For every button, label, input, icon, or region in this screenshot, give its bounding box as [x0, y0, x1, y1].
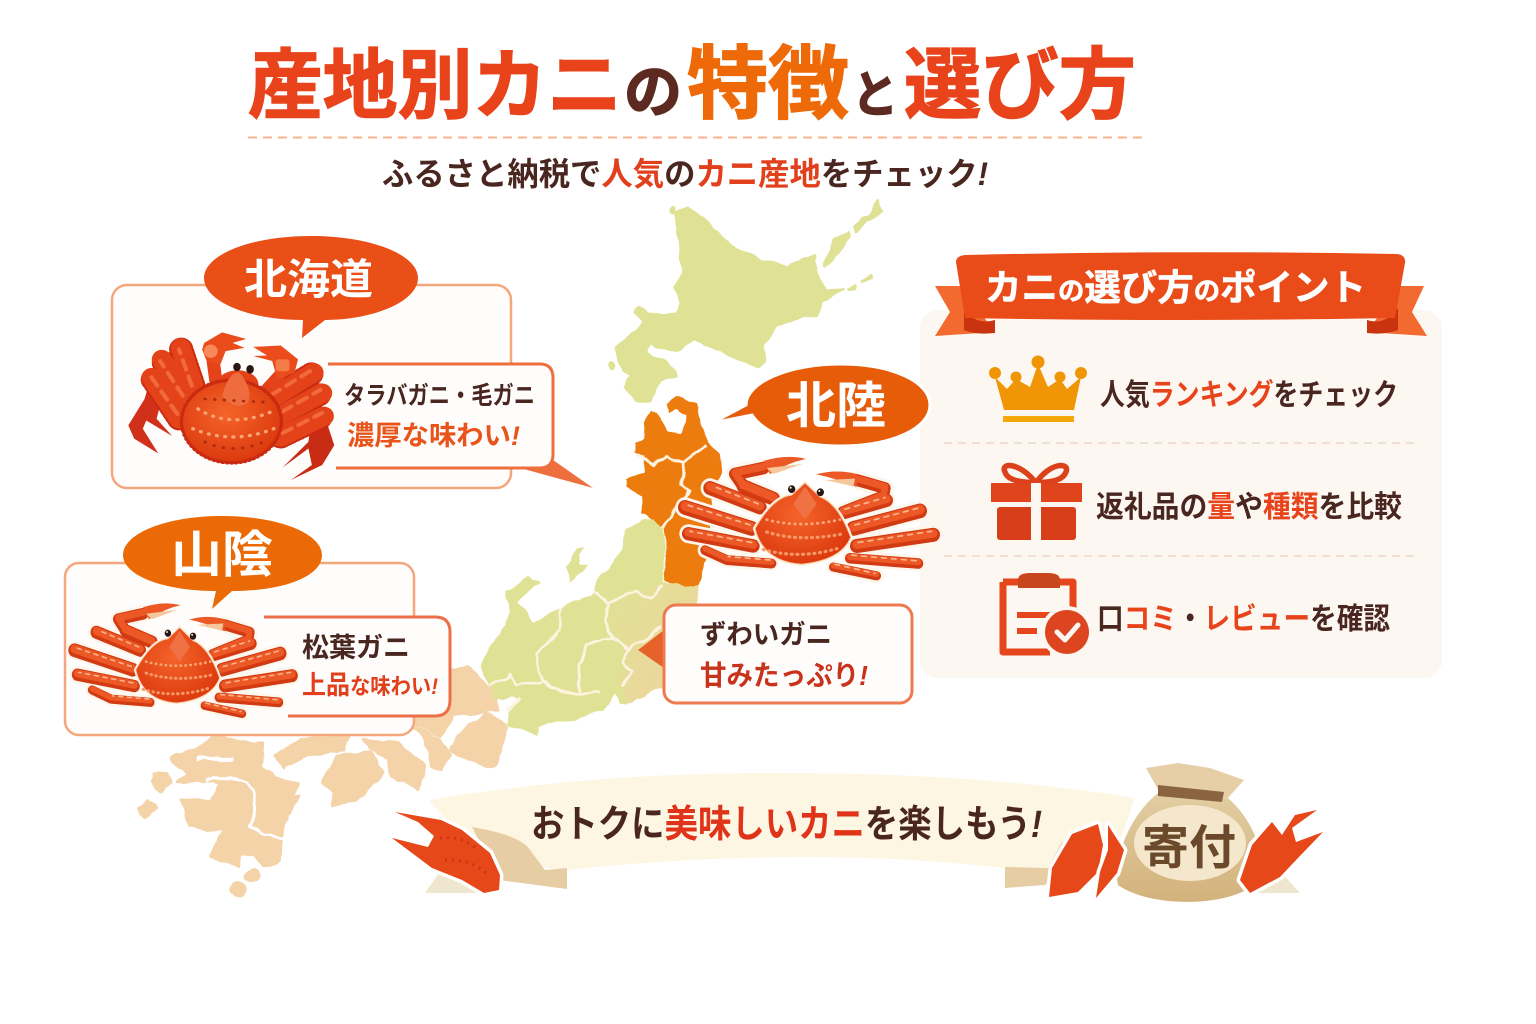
callout: Hokkaido crab — [328, 364, 593, 488]
label: Hokkaido: 北海道 — [244, 256, 373, 303]
icon: clipboard check — [1003, 573, 1093, 658]
panel: San'in — [65, 516, 450, 735]
row: ranking: 人気ランキングをチェック — [1100, 379, 1398, 412]
label: Hokuriku: 北陸 — [786, 378, 886, 434]
illustration: king crab — [128, 332, 334, 480]
title: の — [624, 60, 682, 125]
ribbon heading — [935, 252, 1427, 336]
ribbon heading: カニの選び方のポイント — [985, 267, 1366, 308]
panel: Hokkaido — [112, 236, 593, 488]
callout: Hokuriku snow crab: 甘みたっぷり! — [700, 660, 868, 691]
subtitle: ふるさと納税で人気のカニ産地をチェック! — [382, 156, 988, 192]
callout: San'in crab — [264, 617, 450, 716]
title — [248, 40, 1136, 129]
callout: San'in crab: 松葉ガニ — [302, 633, 410, 663]
bottom banner — [425, 773, 1300, 893]
callout: Hokuriku snow crab: ずわいガニ — [700, 620, 832, 650]
title: と — [852, 67, 898, 123]
illustration: snow crab — [685, 457, 933, 576]
bottom banner: おトクに美味しいカニを楽しもう! — [531, 804, 1042, 846]
icon: crab claw left — [392, 812, 500, 893]
Central Honshu — [480, 520, 698, 736]
label: Hokkaido — [204, 236, 418, 338]
row: compare: 返礼品の量や種類を比較 — [1096, 491, 1402, 524]
label: San'in — [123, 516, 322, 609]
row: reviews: 口コミ・レビューを確認 — [1097, 603, 1390, 636]
callout: Hokkaido crab: 濃厚な味わい! — [347, 421, 520, 451]
label: Hokuriku — [712, 364, 930, 446]
icon: crown — [989, 356, 1087, 422]
Tohoku in orange — [627, 397, 722, 588]
map: Kyushu Shikoku Chugoku region — [137, 667, 508, 895]
title: 選び方 — [904, 41, 1136, 129]
icon: crab claw right — [1240, 810, 1323, 893]
Hokkaido — [610, 201, 882, 400]
Sado island — [566, 546, 588, 583]
title: 特徴 — [687, 40, 849, 129]
label: San'in: 山陰 — [171, 527, 273, 583]
title: 産地別カニ — [248, 44, 622, 129]
callout: Hokkaido crab: タラバガニ・毛ガニ — [344, 382, 535, 410]
icon: gift box — [991, 466, 1082, 540]
map: Hokkaido and Honshu — [480, 201, 882, 736]
panel: how to choose — [920, 252, 1442, 678]
icon: donation bag: 寄付 — [1142, 821, 1236, 874]
icon: donation bag — [1117, 763, 1261, 902]
callout: Hokuriku snow crab — [638, 605, 912, 703]
callout: San'in crab: 上品な味わい! — [302, 670, 438, 700]
icon: crab claw centre — [1049, 824, 1124, 898]
illustration: matsuba crab — [74, 603, 292, 714]
